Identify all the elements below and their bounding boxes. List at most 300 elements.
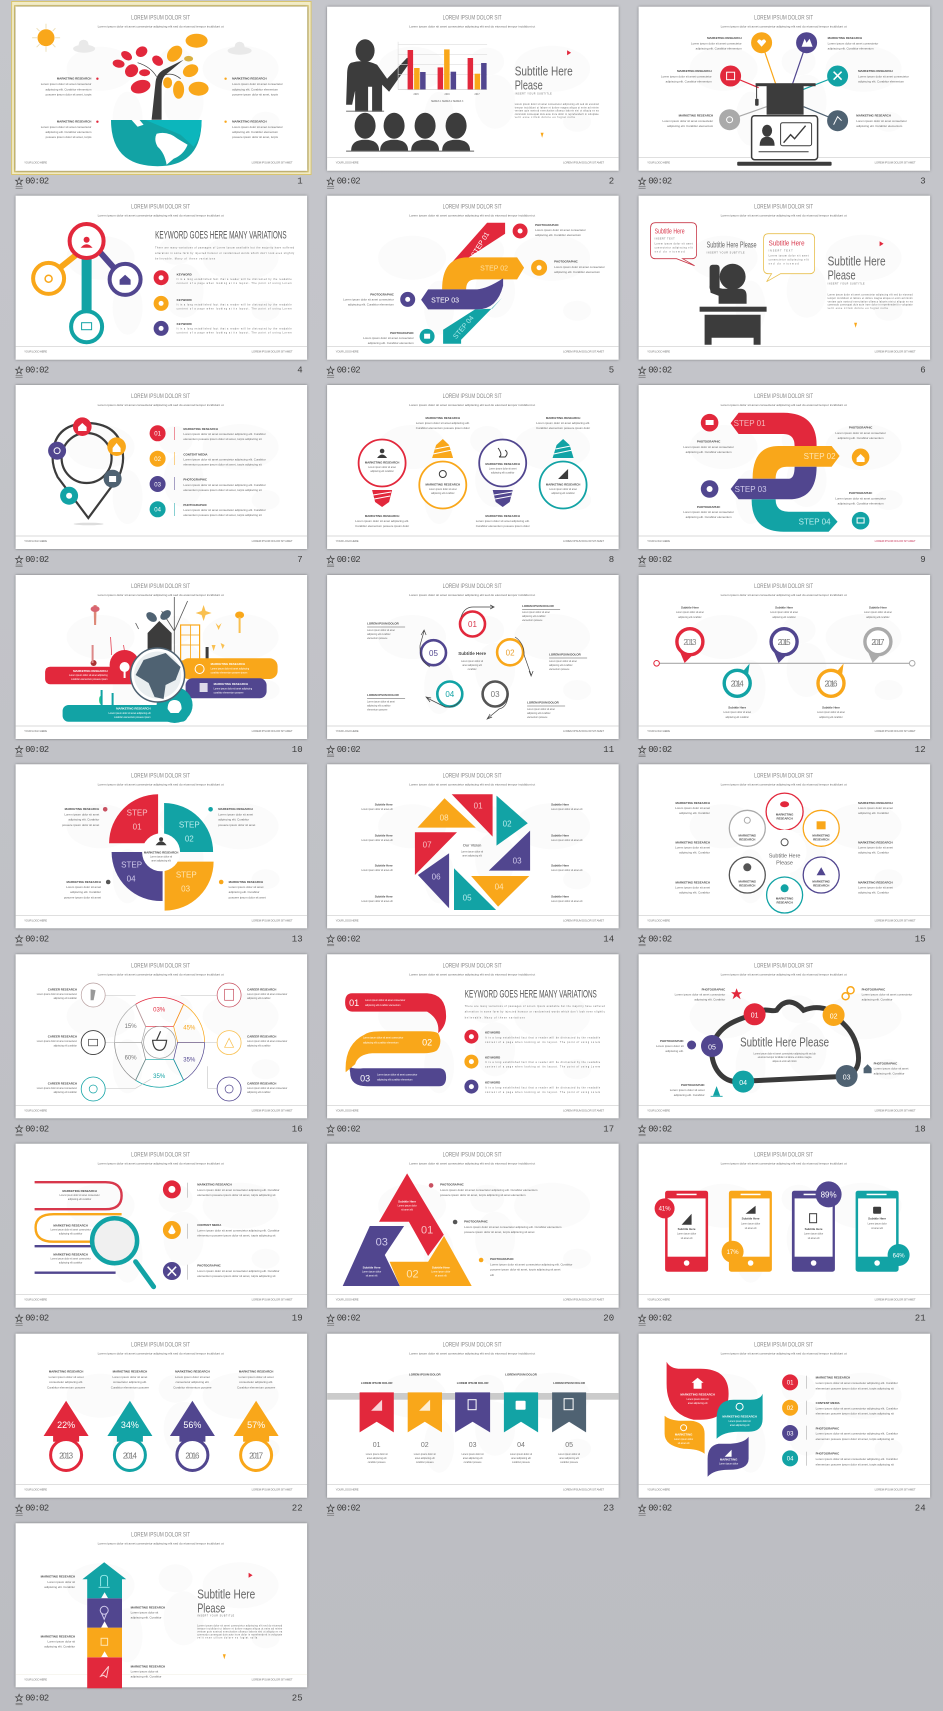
footer (24, 729, 293, 733)
petal contents: RESEARCH (739, 883, 755, 887)
right labels: Subtitle Here (551, 833, 569, 837)
slide 3: graduation cap with icons: Lorem ipsum dolor sit amet consectetur (858, 75, 909, 79)
text block: tempor incididunt ut labore et dolore magna aliqua ut enim ad minim (515, 107, 599, 110)
caption (16, 1314, 303, 1325)
right labels (551, 802, 583, 903)
label blocks: Lorem ipsum dolor sit amet (239, 1375, 274, 1379)
right labels: MARKETING RESEARCH (858, 840, 893, 844)
text block: veniam quis nostrud exercitation ullamco laboris nisi ut aliquip ex ea (197, 1630, 283, 1633)
label blocks: adipiscing elit. Curabitur elementum (45, 130, 92, 134)
label blocks: Curabitur elementum posuere ipsum dolor (476, 524, 530, 528)
footer (24, 1488, 293, 1492)
triangle arrows: sit amet elit (401, 1209, 413, 1212)
banner numbers and notes: 01 (373, 1442, 381, 1449)
footer: LOREM IPSUM DOLOR SIT AMET (875, 1298, 916, 1302)
right labels: Subtitle Here (551, 864, 569, 868)
small icons (687, 987, 872, 1096)
center text: curabitur (468, 668, 477, 671)
caption (16, 177, 303, 188)
label blocks: posuere ipsum dolor sit amet (64, 895, 101, 899)
label blocks: PHOTOGRAPHIC (849, 426, 873, 430)
numbered list: Lorem ipsum dolor sit amet consectetur adipiscing elit. Curabitur (816, 1381, 898, 1385)
leaf: purple (708, 1437, 749, 1477)
paragraph: alteration in some form by injected humour or randomised words which don't look even slightly (155, 252, 295, 255)
winding ribbon: 03 (360, 1073, 370, 1083)
gear pie: 45% (183, 1025, 196, 1031)
speech bubble: orange: sed do eiusmod (769, 264, 799, 266)
bar chart: 2017 (475, 94, 480, 96)
text block: velit esse cillum dolore eu fugiat nulla (197, 1636, 258, 1639)
speech bubble: orange: consectetur adipiscing elit (769, 259, 809, 262)
caption: 00:02 (25, 934, 49, 944)
label blocks: MARKETING RESEARCH (65, 807, 99, 811)
left labels: CAREER RESEARCH (48, 1035, 77, 1039)
ring cycle: 01 (468, 620, 477, 629)
bar: red: Lorem ipsum dolor sit amet adipiscing (69, 674, 108, 677)
slide subtitle: Lorem ipsum dolor sit amet consectetur adipiscing elit sed do eiusmod tempor incididunt ut (98, 1162, 224, 1166)
text block: veniam quis nostrud exercitation ullamco laboris nisi ut aliquip ex ea (515, 110, 599, 113)
label blocks: consectetur adipiscing elit. (239, 1380, 273, 1384)
arrow: 2014: 34% (121, 1420, 139, 1430)
slide 1: tree and globe: adipiscing elit. Curabitur elementum (232, 130, 279, 134)
slide 18: cloud path: PHOTOGRAPHIC (862, 987, 886, 991)
label blocks: MARKETING RESEARCH (113, 1370, 147, 1374)
left labels: MARKETING RESEARCH (675, 880, 710, 884)
right labels: adipiscing elit. Curabitur (858, 890, 889, 894)
caption (16, 934, 303, 946)
bar: red: MARKETING RESEARCH (73, 669, 108, 673)
slide 15: flower of rings (639, 764, 930, 946)
phone: orange: sit amet elit (745, 1227, 757, 1230)
step ribbons: STEP 02 (804, 452, 836, 461)
caption: 00:02 (648, 177, 672, 187)
center: Subtitle Here (769, 853, 800, 859)
caption: 15 (915, 934, 926, 944)
gear pie: 60% (125, 1055, 137, 1061)
label blocks: elementum posuere (549, 668, 570, 671)
caption (639, 555, 926, 566)
keyword list: content of a page when looking at its layout. The point of using Lorem (177, 307, 292, 310)
footer: YOUR LOGO HERE (647, 539, 670, 543)
bar: teal: curabitur elementum posuere ipsum (114, 716, 151, 719)
label blocks: Lorem ipsum dolor sit amet adipiscing elit. (476, 519, 530, 523)
icon: audience (346, 113, 474, 152)
slide 18: cloud path: Lorem ipsum dolor sit amet (874, 1067, 909, 1071)
step ribbons: STEP 01 (470, 231, 491, 259)
right labels (247, 987, 288, 1094)
banner numbers and notes (366, 1442, 580, 1464)
left labels: MARKETING RESEARCH (675, 801, 710, 805)
caption: 00:02 (25, 1504, 49, 1514)
slide subtitle: Lorem ipsum dolor sit amet consectetur adipiscing elit sed do eiusmod tempor incididunt ut (409, 1162, 535, 1166)
footer: LOREM IPSUM DOLOR SIT AMET (252, 729, 293, 733)
triangle arrows: sit amet elit (366, 1275, 378, 1278)
slide 25: stacked up arrow: MARKETING RESEARCH (131, 1605, 165, 1609)
footer (336, 918, 604, 922)
bar: teal: Lorem ipsum dolor sit amet adipiscing elit (108, 712, 151, 715)
caption (16, 1693, 303, 1705)
phone: purple: 89% (821, 1191, 837, 1200)
right labels: Lorem ipsum dolor sit amet consectetur (247, 993, 288, 996)
arrow: 2013: 2013 (59, 1452, 74, 1461)
label blocks: Lorem ipsum dolor sit amet adipiscing elit. (355, 519, 409, 523)
slide 18: cloud path: Lorem ipsum dolor sit amet consectetur (862, 992, 912, 996)
numbered list (782, 1374, 898, 1466)
numbered list: 03 (787, 1431, 794, 1437)
leaf: teal: amet adipiscing elit (730, 1424, 750, 1427)
caption (327, 366, 614, 377)
caption: 00:02 (337, 555, 361, 565)
globe half (111, 120, 202, 166)
label blocks: Lorem ipsum dolor sit amet (817, 711, 845, 714)
slide 25: stacked up arrow: MARKETING RESEARCH (131, 1664, 165, 1668)
left labels: adipiscing elit curabitur (54, 997, 77, 1000)
ring cycle: 02 (506, 648, 515, 658)
phone: red: 41% (659, 1207, 671, 1213)
footer: YOUR LOGO HERE (336, 1108, 359, 1112)
footer: LOREM IPSUM DOLOR SIT AMET (563, 1298, 604, 1302)
text block: Lorem ipsum dolor sit amet consectetur adipiscing elit sed do eiusmod (828, 294, 913, 297)
banner numbers and notes: curabitur posuere (368, 1461, 386, 1464)
label blocks: Lorem ipsum dolor sit amet (367, 629, 395, 632)
cloud heading: aliqua ut enim ad minim (772, 1060, 797, 1063)
slide title: LOREM IPSUM DOLOR SIT (443, 394, 502, 400)
label blocks: adipiscing elit. Curabitur elementum (535, 233, 582, 237)
label blocks: MARKETING RESEARCH (66, 880, 101, 884)
caption (16, 745, 303, 756)
slide title: LOREM IPSUM DOLOR SIT (131, 394, 190, 400)
footer: LOREM IPSUM DOLOR SIT AMET (252, 1677, 293, 1681)
slide title: LOREM IPSUM DOLOR SIT (754, 963, 813, 969)
petal contents: MARKETING (812, 879, 831, 883)
label blocks: MARKETING RESEARCH (57, 120, 91, 124)
step icon circles (400, 224, 547, 344)
text block: velit esse cillum dolore eu fugiat nulla (515, 116, 575, 119)
numbered list: elementum posuere ipsum dolor sit amet, turpis adipiscing sit (816, 1437, 894, 1441)
footer (647, 161, 916, 165)
slide 5: diagonal step ribbons: Lorem ipsum dolor sit amet consectetur (343, 298, 394, 302)
leaf: red: MARKETING RESEARCH (680, 1393, 715, 1397)
label blocks: Lorem ipsum dolor sit amet (676, 611, 704, 614)
label blocks (683, 426, 886, 519)
label blocks: MARKETING RESEARCH (197, 1183, 232, 1187)
footer (24, 161, 293, 165)
footer: YOUR LOGO HERE (24, 161, 47, 165)
label blocks: PHOTOGRAPHIC (554, 260, 579, 264)
footer: LOREM IPSUM DOLOR SIT AMET (563, 918, 604, 922)
text block: commodo consequat duis aute irure dolor in reprehenderit in voluptate (197, 1633, 283, 1636)
aperture segments: 01 (474, 801, 483, 810)
markers (223, 1573, 253, 1659)
right labels: adipiscing elit curabitur (247, 997, 271, 1000)
donut chart: STEP (127, 808, 148, 817)
bulb: red (359, 440, 406, 507)
label blocks: LOREM IPSUM DOLOR (367, 693, 400, 697)
slide subtitle: Lorem ipsum dolor sit amet consectetur adipiscing elit sed do eiusmod tempor incididunt ut (98, 403, 224, 407)
slide subtitle: Lorem ipsum dolor sit amet consectetur adipiscing elit sed do eiusmod tempor incididunt ut (721, 782, 847, 786)
label blocks: MARKETING RESEARCH (677, 69, 712, 73)
banner numbers and notes: curabitur posuere (512, 1461, 531, 1464)
slide title: LOREM IPSUM DOLOR SIT (131, 205, 190, 211)
caption: 00:02 (337, 1314, 361, 1324)
caption: 00:02 (25, 1314, 49, 1324)
right labels (858, 801, 893, 894)
banner numbers and notes: 05 (565, 1442, 573, 1449)
caption (639, 366, 926, 377)
winding ribbon: Lorem ipsum dolor sit amet consectetur (377, 1073, 418, 1076)
triangle arrows: Subtitle Here (432, 1266, 450, 1270)
caption: 22 (292, 1504, 303, 1514)
right labels: adipiscing elit. Curabitur (858, 850, 889, 854)
slide 18: cloud path: adipiscing elit. Curabitur (862, 997, 892, 1001)
slide 13: four step donut (16, 764, 307, 946)
label blocks: Lorem ipsum dolor sit amet consectetur (835, 496, 886, 500)
center: Please (776, 860, 793, 866)
footer: YOUR LOGO HERE (647, 729, 670, 733)
label blocks: elit (490, 1273, 494, 1277)
numbered list: CONTENT MEDIA (183, 452, 208, 456)
keyword list: KEYWORD (177, 322, 192, 326)
slide 7: map pin list (16, 385, 307, 566)
left labels: Lorem ipsum dolor sit amet elit (361, 869, 393, 872)
caption: 18 (915, 1124, 926, 1134)
slide 5: diagonal step ribbons (327, 196, 619, 377)
triangle arrows: Lorem ipsum dolor (398, 1205, 417, 1208)
label blocks: Curabitur elementum posuere (111, 1386, 149, 1390)
slide 22: four arrows with years (16, 1334, 307, 1515)
right labels: Subtitle Here (551, 894, 569, 898)
caption: 00:02 (25, 1124, 49, 1134)
footer: LOREM IPSUM DOLOR SIT AMET (875, 1108, 916, 1112)
winding ribbon: 02 (422, 1037, 432, 1047)
bar: orange: Lorem ipsum dolor sit amet adipiscing (211, 668, 250, 670)
label blocks: Subtitle Here (681, 606, 699, 610)
label blocks: Lorem ipsum dolor sit amet consectetur adipiscing elit. Curabitur (197, 1188, 279, 1192)
triangle arrows: sit amet elit (435, 1275, 447, 1278)
slide 25: stacked up arrow: adipiscing elit. Curabitur (131, 1674, 161, 1678)
caption: 00:02 (25, 555, 49, 565)
caption: 00:02 (25, 745, 49, 755)
label blocks: Lorem ipsum dolor sit amet consectetur (535, 228, 586, 232)
slide 24: leaf shapes with list (639, 1334, 930, 1515)
banners (360, 1392, 586, 1432)
numbered list: 02 (787, 1406, 794, 1412)
label blocks: Lorem ipsum dolor sit amet (175, 1375, 210, 1379)
bar: orange: curabitur elementum posuere ipsum (211, 672, 247, 674)
label blocks: elementum posuere (367, 637, 388, 640)
subtitle heading: INSERT YOUR SUBTITLE (197, 1615, 235, 1617)
label blocks: adipiscing elit. Curabitur elementum (686, 515, 732, 519)
label blocks: Lorem ipsum dolor sit amet (670, 1088, 705, 1092)
label blocks: PHOTOGRAPHIC (535, 223, 560, 227)
banner headings: LOREM IPSUM DOLOR (553, 1381, 586, 1385)
icon circles (719, 32, 848, 131)
slide 11: five ring cycle (327, 575, 619, 756)
footer: YOUR LOGO HERE (24, 1298, 47, 1302)
footer: LOREM IPSUM DOLOR SIT AMET (563, 161, 604, 165)
label blocks: posuere ipsum dolor sit amet, turpis adipiscing sit amet (490, 1268, 561, 1272)
label blocks: MARKETING RESEARCH (41, 1634, 75, 1638)
left labels: Subtitle Here (375, 833, 393, 837)
label blocks: Subtitle Here (728, 706, 746, 710)
arrow: 2017: 57% (247, 1420, 265, 1430)
step ribbons: STEP 02 (480, 266, 508, 273)
label blocks: adipiscing elit. Curabitur (70, 890, 101, 894)
footer (647, 539, 916, 543)
icon: sun (32, 24, 60, 52)
paragraph (465, 1005, 606, 1019)
footer (336, 350, 604, 354)
label blocks (367, 604, 587, 719)
label blocks: Lorem ipsum dolor sit amet consectetur (662, 119, 713, 123)
slide subtitle: Lorem ipsum dolor sit amet consectetur adipiscing elit sed do eiusmod tempor incididunt ut (721, 25, 847, 29)
ring cycle: 04 (445, 690, 455, 699)
caption: 24 (915, 1504, 926, 1514)
slide title: LOREM IPSUM DOLOR SIT (754, 773, 813, 779)
footer: YOUR LOGO HERE (647, 918, 670, 922)
caption (16, 366, 303, 377)
label blocks (62, 807, 101, 899)
left labels: Subtitle Here (375, 864, 393, 868)
book labels: Lorem ipsum dolor sit amet consectetur (59, 1194, 100, 1197)
label blocks: Lorem ipsum dolor sit amet consectetur (691, 42, 742, 46)
left labels: adipiscing elit. Curabitur (679, 850, 710, 854)
slide title: LOREM IPSUM DOLOR SIT (754, 1153, 813, 1159)
bulb: teal (540, 439, 587, 508)
footer (647, 918, 916, 922)
label blocks: PHOTOGRAPHIC (197, 1264, 222, 1268)
book labels (50, 1189, 100, 1265)
arrow: 2013 (44, 1401, 89, 1470)
bulb: teal: Lorem ipsum dolor sit amet (549, 488, 577, 491)
slide 3: graduation cap with icons: adipiscing elit. Curabitur elementum (856, 124, 903, 128)
slide title: LOREM IPSUM DOLOR SIT (443, 773, 502, 779)
footer (336, 539, 604, 543)
numbered list: elementum posuere ipsum dolor sit amet, turpis adipiscing sit (816, 1386, 894, 1390)
slide 3: graduation cap with icons: Lorem ipsum dolor sit amet consectetur (828, 42, 878, 46)
timeline: 2016 (824, 680, 838, 688)
paragraph (155, 247, 295, 261)
aperture segments: 08 (440, 813, 449, 822)
slide subtitle: Lorem ipsum dolor sit amet consectetur adipiscing elit sed do eiusmod tempor incididunt ut (721, 1162, 847, 1166)
step ribbons (731, 413, 840, 532)
slide 13: four step donut: adipiscing elit. Curabitur (229, 890, 259, 894)
slide title: LOREM IPSUM DOLOR SIT (131, 584, 190, 590)
banner numbers and notes: amet adipiscing elit (415, 1457, 435, 1460)
label blocks: adipiscing elit curabitur (866, 616, 890, 619)
slide 13: four step donut: MARKETING RESEARCH (229, 880, 263, 884)
label blocks: Lorem ipsum dolor sit amet consectetur adipiscing elit. Curabitur (197, 1229, 279, 1233)
label blocks: posuere ipsum dolor sit amet, turpis (46, 135, 92, 139)
footer: YOUR LOGO HERE (24, 1108, 47, 1112)
paragraph: believable. Many of these variations (155, 258, 216, 261)
label blocks: adipiscing elit. (665, 1049, 684, 1053)
bar: red (45, 650, 140, 684)
center icon and text: MARKETING RESEARCH (144, 850, 178, 854)
caption (639, 934, 926, 946)
keyword list: KEYWORD (485, 1081, 500, 1085)
slide 13: four step donut: adipiscing elit. Curabitur (218, 817, 249, 821)
center text (458, 651, 486, 671)
slide title: LOREM IPSUM DOLOR SIT (443, 584, 502, 590)
bulb: red: MARKETING RESEARCH (365, 460, 399, 464)
subtitle heading: Please (515, 78, 543, 93)
footer (24, 1677, 293, 1681)
slide 9: curved step ribbons (639, 385, 930, 566)
petal contents: MARKETING (739, 879, 757, 883)
label blocks: Lorem ipsum dolor sit (47, 1580, 75, 1584)
book labels: Lorem ipsum dolor sit amet consectetur (50, 1229, 91, 1232)
left labels: Lorem ipsum dolor sit amet elit (361, 900, 393, 903)
label blocks: adipiscing elit. Curabitur (694, 997, 725, 1001)
subtitle heading (515, 64, 573, 96)
selection frame (12, 2, 311, 174)
slide 23: hanging banners (327, 1334, 619, 1515)
text block (828, 294, 913, 310)
petal contents: MARKETING (776, 812, 794, 816)
slide title: LOREM IPSUM DOLOR SIT (131, 773, 190, 779)
caption: 00:02 (648, 366, 672, 376)
slide 18: cloud path (639, 954, 930, 1136)
slide title: LOREM IPSUM DOLOR SIT (754, 1343, 813, 1349)
footer: LOREM IPSUM DOLOR SIT AMET (252, 918, 293, 922)
label blocks: adipiscing elit curabitur (527, 712, 551, 715)
donut chart: STEP (179, 820, 200, 829)
slide 1: tree and globe: Lorem ipsum dolor sit amet consectetur (232, 125, 283, 129)
right labels: adipiscing elit curabitur (247, 1091, 271, 1094)
label blocks: Lorem ipsum dolor sit amet consectetur adipiscing elit. Curabitur (197, 1269, 279, 1273)
petal contents (739, 801, 831, 904)
caption (327, 555, 614, 566)
bulb: orange: adipiscing elit curabitur (431, 492, 455, 495)
slide 13: four step donut: Lorem ipsum dolor sit amet (218, 812, 253, 816)
numbered list: PHOTOGRAPHIC (183, 478, 208, 482)
label blocks: Lorem ipsum dolor sit amet (549, 660, 577, 663)
caption: 00:02 (25, 1693, 49, 1703)
keyword list: It is a long established fact that a reader will be distracted by the readable (485, 1086, 601, 1089)
text block: Lorem ipsum dolor sit amet consectetur adipiscing elit sed do eiusmod (515, 103, 599, 106)
caption (327, 1314, 614, 1325)
leaf: orange: MARKETING (675, 1433, 693, 1437)
stacked arrow (82, 1562, 126, 1688)
slide 3: graduation cap with icons (639, 7, 930, 188)
label blocks: adipiscing elit curabitur (522, 615, 546, 618)
footer (647, 350, 916, 354)
right labels: CAREER RESEARCH (247, 1081, 276, 1085)
center icon and text: amet adipiscing elit (151, 859, 171, 862)
phone: teal: 64% (893, 1254, 905, 1260)
triangle arrows: 02 (406, 1269, 419, 1281)
slide 10: green city and globe (16, 575, 307, 756)
footer: YOUR LOGO HERE (336, 161, 359, 165)
winding ribbon: adipiscing elit curabitur elementum (363, 1041, 399, 1044)
footer: LOREM IPSUM DOLOR SIT AMET (875, 161, 916, 165)
label blocks: Lorem ipsum dolor sit amet (64, 812, 99, 816)
label blocks: PHOTOGRAPHIC (697, 440, 721, 444)
book shapes (35, 1182, 122, 1273)
banner numbers and notes: curabitur posuere (416, 1461, 434, 1464)
label blocks (440, 1183, 572, 1277)
caption (639, 177, 926, 188)
gear pie (106, 995, 217, 1088)
banner headings: LOREM IPSUM DOLOR (361, 1381, 393, 1385)
caption: 00:02 (648, 934, 672, 944)
caption: 8 (609, 555, 614, 565)
label blocks: Curabitur elementum posuere ipsum dolor (416, 426, 470, 430)
phone: teal: Subtitle Here (868, 1217, 886, 1221)
caption: 23 (603, 1504, 614, 1514)
slide subtitle: Lorem ipsum dolor sit amet consectetur adipiscing elit sed do eiusmod tempor incididunt ut (409, 782, 535, 786)
